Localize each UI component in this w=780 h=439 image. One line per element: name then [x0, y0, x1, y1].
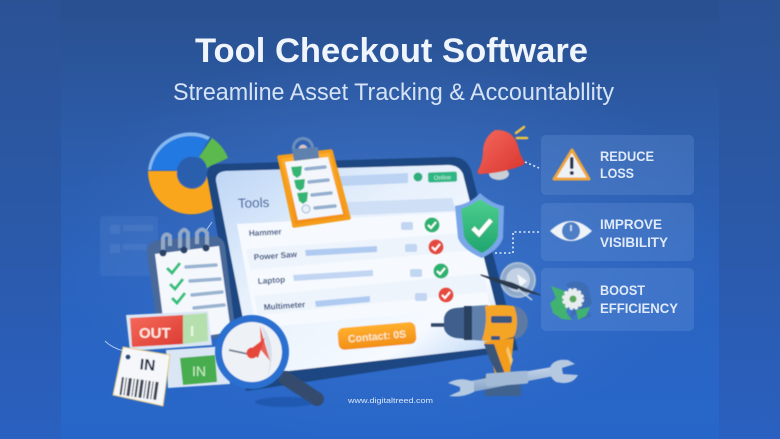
row: laptop: [258, 270, 373, 286]
button: contact: [337, 322, 417, 350]
icon: drill: [431, 305, 528, 374]
icon: donut chart: [148, 132, 228, 214]
row: multimeter: Multimeter: [264, 300, 306, 312]
label: improve visibility: IMPROVE: [600, 217, 662, 232]
icon: clipboard: [279, 138, 349, 226]
status chips: [401, 222, 427, 301]
panel: improve visibility: [541, 203, 694, 261]
icon: magnifier: [215, 315, 317, 407]
button: contact: Contact: 0S: [347, 328, 407, 345]
tag: out: OUT: [139, 325, 171, 342]
tag: i: I: [190, 323, 194, 340]
decorative link lines: [105, 222, 212, 351]
row: power saw: [254, 246, 377, 262]
tag: in green: IN: [192, 363, 206, 379]
button: online: [428, 172, 457, 183]
label: boost efficiency: BOOST: [600, 283, 646, 298]
panel: boost efficiency: [541, 268, 694, 331]
status: green check: [424, 218, 440, 232]
subtitle: Streamline Asset Tracking & Accountabllity: [173, 79, 615, 106]
table rows: [237, 212, 490, 328]
row: laptop: Laptop: [258, 275, 285, 286]
tablet: [207, 157, 518, 391]
icon: bell: [478, 127, 527, 180]
label: reduce loss: REDUCE: [600, 149, 654, 164]
status dot: [414, 172, 422, 182]
button: online: Online: [434, 175, 452, 182]
label: reduce loss: LOSS: [600, 166, 634, 181]
label: boost efficiency: EFFICIENCY: [600, 301, 678, 316]
tag: barcode in: [113, 347, 170, 406]
row: multimeter: [264, 296, 370, 312]
icon: notepad: [147, 230, 236, 345]
icon: gauge and pen: [481, 263, 540, 300]
panel: reduce loss: [541, 135, 694, 195]
title: Tool Checkout Software: [195, 32, 588, 70]
search bar: [300, 173, 408, 188]
faded background panel: [100, 216, 158, 276]
status: green check: [434, 264, 448, 278]
tag: barcode in: IN: [139, 356, 156, 375]
heading: tools: Tools: [238, 195, 270, 211]
tag panel: out and in: [126, 311, 230, 388]
row: hammer: Hammer: [249, 227, 283, 238]
icon: shield: [455, 193, 504, 258]
row: power saw: Power Saw: [254, 250, 298, 262]
status: red check: [438, 288, 454, 302]
status: red check: [428, 240, 444, 254]
icon: eye: [550, 221, 592, 241]
icon: warning: [554, 150, 589, 179]
connector lines: [495, 162, 539, 253]
label: improve visibility: VISIBILITY: [600, 235, 668, 250]
website url: www.digitaltreed.com: [347, 396, 433, 405]
icon: gear puzzle: [550, 281, 592, 320]
icon: wrench: [448, 360, 578, 396]
